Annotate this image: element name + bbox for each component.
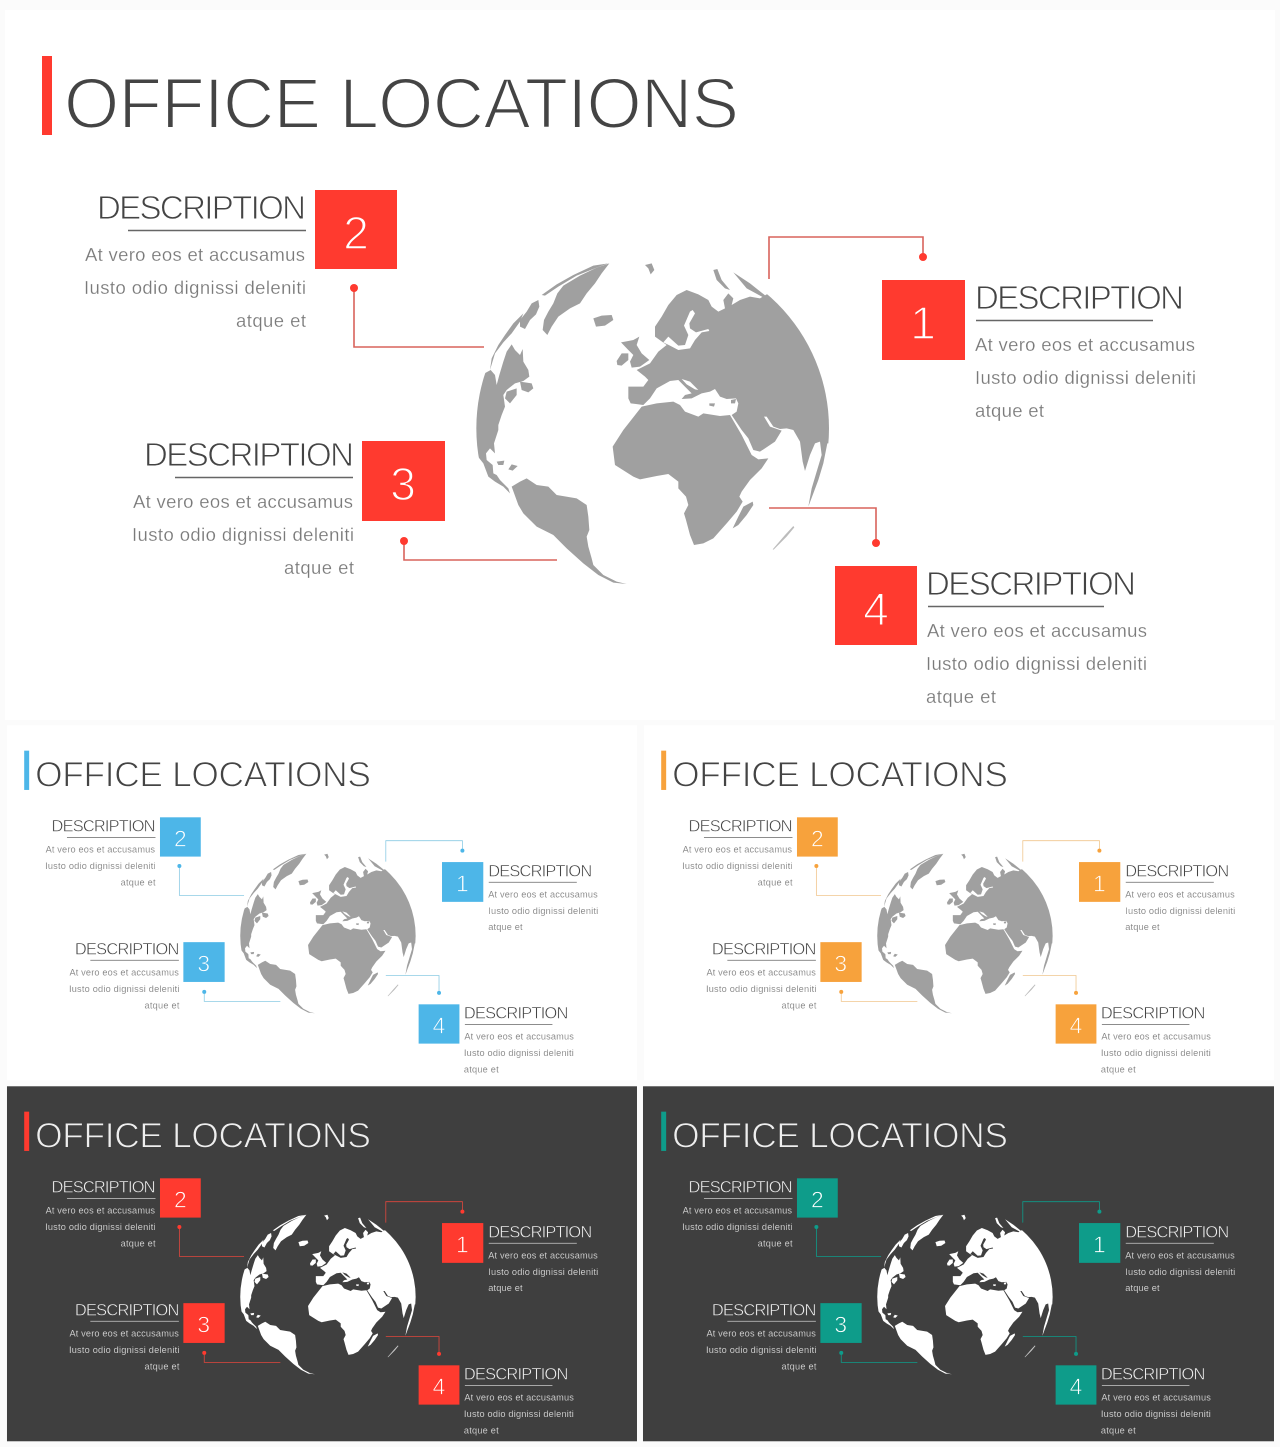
callout 4: At vero eos et accusamus: [1101, 1393, 1211, 1403]
callout 2: Iusto odio dignissi deleniti: [84, 277, 306, 298]
callout 3: atque et: [145, 1361, 180, 1371]
callout 1: At vero eos et accusamus: [488, 889, 598, 899]
callout 3: Iusto odio dignissi deleniti: [69, 1345, 179, 1355]
callout 2: At vero eos et accusamus: [46, 1206, 155, 1216]
callout 4: Iusto odio dignissi deleniti: [464, 1409, 574, 1419]
panel: small dark red slide: [7, 1086, 637, 1441]
title: OFFICE LOCATIONS: [35, 755, 371, 794]
callout 4: 4: [863, 583, 889, 635]
callout 4: Iusto odio dignissi deleniti: [464, 1048, 574, 1058]
callout 4: [419, 1365, 574, 1435]
callout 3: [69, 1302, 225, 1371]
callout 1: 1: [456, 1231, 469, 1257]
callout 2: Iusto odio dignissi deleniti: [45, 861, 156, 871]
callout 2: Iusto odio dignissi deleniti: [45, 1222, 156, 1232]
callout 1: DESCRIPTION: [1125, 1223, 1229, 1241]
callout 1: 1: [910, 297, 936, 349]
callout 1: [442, 1223, 598, 1293]
callout 3: DESCRIPTION: [712, 941, 816, 959]
callout 1: At vero eos et accusamus: [1125, 889, 1235, 899]
panel: small dark teal slide: [643, 1086, 1274, 1441]
callout 3: At vero eos et accusamus: [69, 967, 179, 977]
callout 2: atque et: [758, 877, 793, 887]
callout 3: DESCRIPTION: [75, 941, 179, 959]
globe: [463, 263, 843, 584]
callout 4: DESCRIPTION: [464, 1005, 568, 1023]
callout 2: 2: [174, 1187, 187, 1213]
callout 1: atque et: [488, 1283, 523, 1293]
callout 3: DESCRIPTION: [144, 436, 354, 473]
callout 2: [682, 817, 838, 887]
callout 2: atque et: [121, 1238, 156, 1248]
callout 3: Iusto odio dignissi deleniti: [706, 984, 816, 994]
callout 4: At vero eos et accusamus: [927, 620, 1147, 641]
callout 2: [45, 1178, 201, 1248]
connectors: [177, 1202, 464, 1362]
callout 1: [442, 862, 598, 932]
callout 2: 2: [811, 1187, 824, 1213]
callout 4: Iusto odio dignissi deleniti: [1101, 1048, 1211, 1058]
callout 3: [69, 941, 225, 1010]
callout 4: atque et: [464, 1064, 499, 1074]
callout 1: [1079, 862, 1235, 932]
connectors: [350, 237, 927, 560]
callout 1: Iusto odio dignissi deleniti: [488, 1267, 598, 1277]
title bar accent: [24, 751, 29, 790]
title bar accent: [42, 56, 52, 135]
globe: [234, 1215, 423, 1374]
callout 3: [132, 436, 445, 578]
callout 4: 4: [1070, 1374, 1083, 1400]
title bar accent: [661, 751, 666, 790]
callout 1: DESCRIPTION: [1125, 862, 1229, 880]
callout 1: 1: [1093, 870, 1106, 896]
callout 2: Iusto odio dignissi deleniti: [682, 861, 793, 871]
callout 3: 3: [390, 458, 416, 510]
connectors: [814, 841, 1101, 1001]
callout 3: atque et: [284, 557, 354, 578]
callout 3: 3: [197, 951, 210, 977]
callout 4: DESCRIPTION: [464, 1366, 568, 1384]
callout 1: Iusto odio dignissi deleniti: [1125, 906, 1235, 916]
callout 4: DESCRIPTION: [926, 565, 1136, 602]
callout 2: At vero eos et accusamus: [85, 244, 305, 265]
callout 3: 3: [834, 951, 847, 977]
callout 1: 1: [456, 870, 469, 896]
callout 1: [882, 279, 1196, 421]
connectors: [814, 1202, 1101, 1362]
panel: small orange slide: [644, 725, 1274, 1080]
callout 1: Iusto odio dignissi deleniti: [975, 367, 1196, 388]
callout 4: atque et: [1101, 1425, 1136, 1435]
callout 1: atque et: [1125, 922, 1160, 932]
callout 1: Iusto odio dignissi deleniti: [488, 906, 598, 916]
callout 1: 1: [1093, 1231, 1106, 1257]
callout 2: atque et: [121, 877, 156, 887]
callout 4: [835, 565, 1147, 707]
callout 1: At vero eos et accusamus: [1125, 1250, 1235, 1260]
callout 1: DESCRIPTION: [488, 862, 592, 880]
title: OFFICE LOCATIONS: [672, 755, 1008, 794]
callout 3: atque et: [782, 1361, 817, 1371]
callout 4: Iusto odio dignissi deleniti: [1101, 1409, 1211, 1419]
callout 4: atque et: [926, 686, 996, 707]
callout 4: DESCRIPTION: [1101, 1005, 1205, 1023]
callout 1: atque et: [488, 922, 523, 932]
callout 4: [1056, 1365, 1211, 1435]
callout 2: Iusto odio dignissi deleniti: [682, 1222, 793, 1232]
title: OFFICE LOCATIONS: [35, 1116, 371, 1155]
callout 1: DESCRIPTION: [975, 279, 1184, 316]
callout 3: At vero eos et accusamus: [706, 967, 816, 977]
panel: small blue slide: [7, 725, 637, 1080]
callout 3: [706, 1302, 862, 1371]
callout 2: [682, 1178, 838, 1248]
title: OFFICE LOCATIONS: [672, 1116, 1008, 1155]
callout 2: DESCRIPTION: [689, 1179, 793, 1197]
callout 2: At vero eos et accusamus: [683, 845, 792, 855]
callout 3: Iusto odio dignissi deleniti: [132, 524, 354, 545]
callout 3: atque et: [145, 1000, 180, 1010]
callout 2: DESCRIPTION: [52, 1179, 156, 1197]
callout 4: DESCRIPTION: [1101, 1366, 1205, 1384]
callout 3: atque et: [782, 1000, 817, 1010]
callout 1: atque et: [975, 400, 1044, 421]
callout 2: atque et: [758, 1238, 793, 1248]
callout 4: [419, 1004, 574, 1074]
callout 1: Iusto odio dignissi deleniti: [1125, 1267, 1235, 1277]
callout 4: [1056, 1004, 1211, 1074]
callout 2: DESCRIPTION: [52, 818, 156, 836]
callout 4: atque et: [464, 1425, 499, 1435]
callout 3: DESCRIPTION: [75, 1302, 179, 1320]
callout 1: atque et: [1125, 1283, 1160, 1293]
callout 2: 2: [174, 826, 187, 852]
callout 3: Iusto odio dignissi deleniti: [706, 1345, 816, 1355]
callout 4: At vero eos et accusamus: [464, 1032, 574, 1042]
callout 4: At vero eos et accusamus: [1101, 1032, 1211, 1042]
callout 1: At vero eos et accusamus: [975, 334, 1195, 355]
callout 4: 4: [433, 1013, 446, 1039]
callout 4: 4: [1070, 1013, 1083, 1039]
callout 4: Iusto odio dignissi deleniti: [926, 653, 1147, 674]
callout 2: At vero eos et accusamus: [46, 845, 155, 855]
callout 1: DESCRIPTION: [488, 1223, 592, 1241]
callout 3: At vero eos et accusamus: [69, 1328, 179, 1338]
globe: [871, 854, 1060, 1013]
connectors: [177, 841, 464, 1001]
globe: [234, 854, 423, 1013]
callout 4: atque et: [1101, 1064, 1136, 1074]
title bar accent: [24, 1112, 29, 1151]
callout 2: At vero eos et accusamus: [683, 1206, 792, 1216]
callout 1: [1079, 1223, 1235, 1293]
panel: large red slide: [5, 10, 1275, 720]
callout 2: [84, 189, 397, 331]
callout 3: [706, 941, 862, 1010]
callout 2: DESCRIPTION: [689, 818, 793, 836]
callout 3: DESCRIPTION: [712, 1302, 816, 1320]
callout 3: Iusto odio dignissi deleniti: [69, 984, 179, 994]
callout 2: atque et: [236, 310, 306, 331]
callout 3: At vero eos et accusamus: [706, 1328, 816, 1338]
callout 2: 2: [811, 826, 824, 852]
title bar accent: [661, 1112, 666, 1151]
title: OFFICE LOCATIONS: [64, 65, 739, 144]
callout 4: 4: [433, 1374, 446, 1400]
callout 3: 3: [197, 1312, 210, 1338]
callout 3: At vero eos et accusamus: [133, 491, 353, 512]
callout 4: At vero eos et accusamus: [464, 1393, 574, 1403]
globe: [871, 1215, 1060, 1374]
callout 2: DESCRIPTION: [97, 189, 306, 226]
callout 3: 3: [834, 1312, 847, 1338]
callout 1: At vero eos et accusamus: [488, 1250, 598, 1260]
callout 2: 2: [343, 207, 369, 259]
callout 2: [45, 817, 201, 887]
